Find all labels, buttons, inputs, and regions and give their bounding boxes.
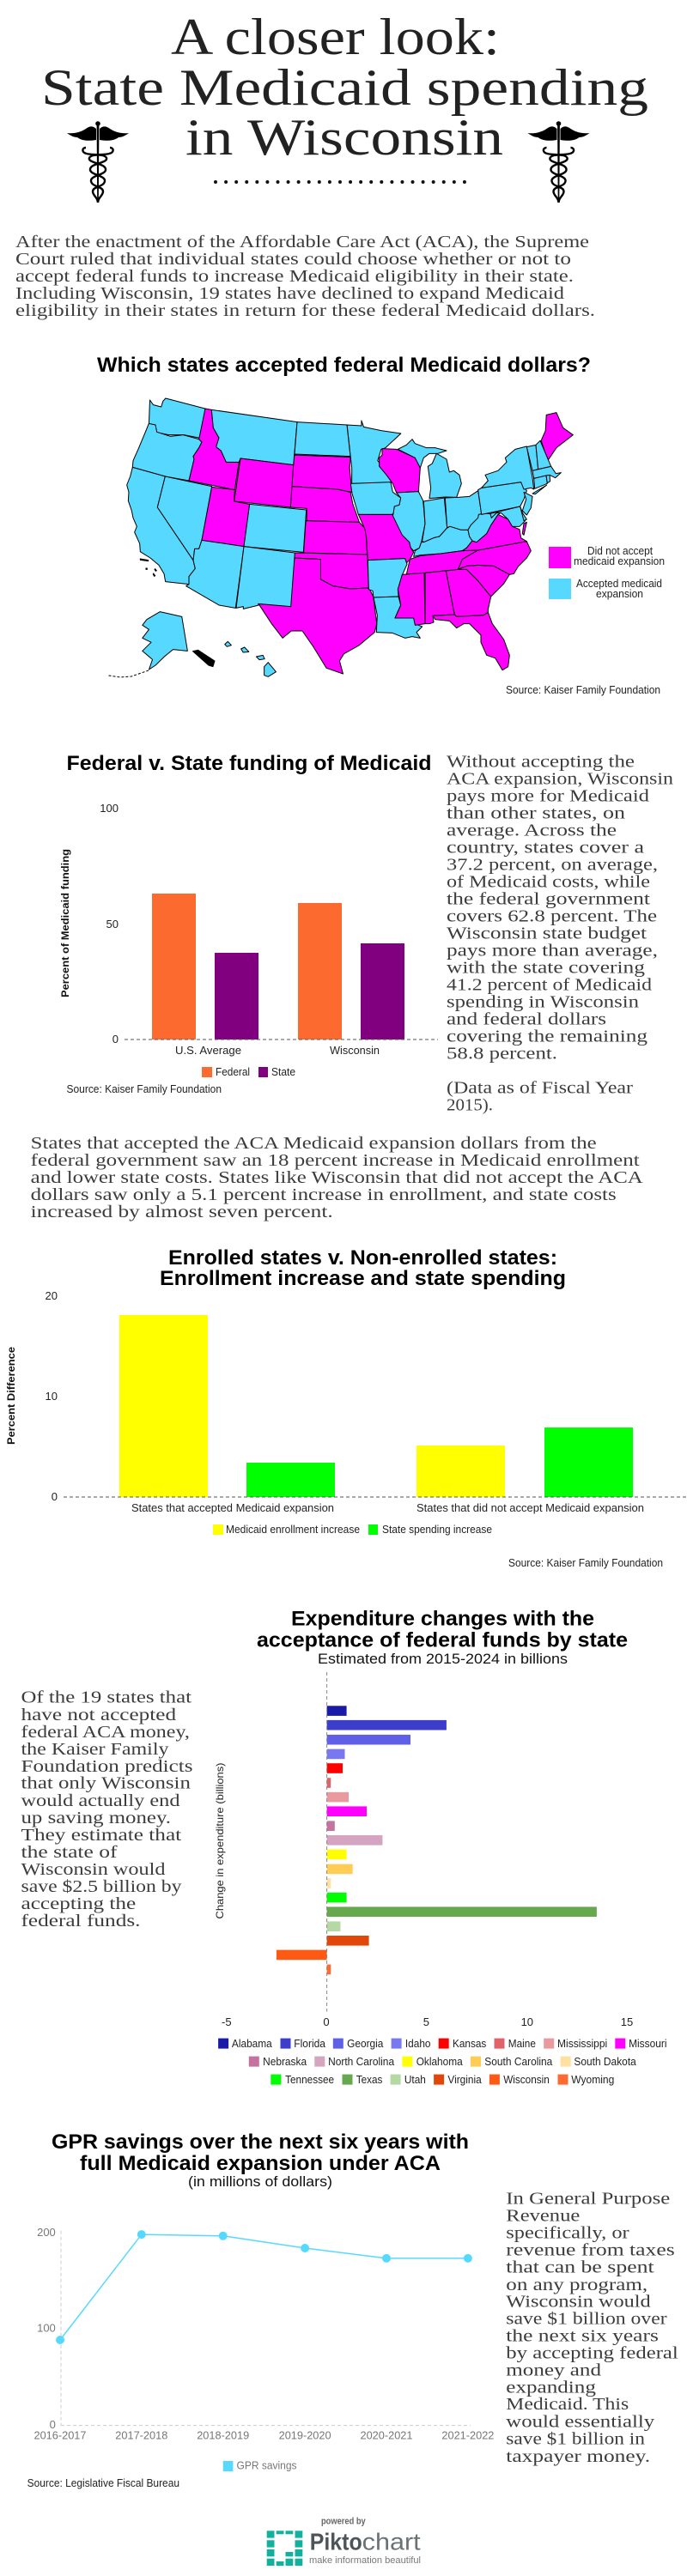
Piktochart logo: Pikto	[310, 2529, 362, 2555]
states: east	[350, 439, 561, 670]
text: Wisconsin pays more: the federal government	[447, 889, 651, 908]
text: General Purpose Revenue: money and	[506, 2361, 601, 2379]
heading: enrolled states: Enrollment increase and state spending	[160, 1267, 566, 1290]
chart legend: Missouri	[629, 2037, 667, 2050]
text: Wisconsin pays more: ACA expansion, Wisconsin	[447, 769, 673, 788]
heading: federal v. state: Federal v. State funding of Medicaid	[67, 752, 431, 775]
x axis ticks: 0	[323, 2015, 330, 2028]
heading: GPR savings: (in millions of dollars)	[188, 2173, 332, 2190]
heading: enrolled states	[160, 1246, 566, 1290]
title: State Medicaid spending	[41, 59, 648, 116]
map legend: Did not accept	[587, 544, 653, 557]
map legend: expansion	[596, 587, 643, 600]
x axis labels: 2017-2018	[115, 2429, 167, 2441]
chart legend: Tennessee	[285, 2073, 334, 2086]
text: General Purpose Revenue: save $1 billion in	[506, 2430, 645, 2449]
text: General Purpose Revenue: Revenue	[506, 2206, 580, 2225]
text: Wisconsin pays more	[447, 752, 673, 1114]
chart legend: State spending increase	[382, 1523, 492, 1536]
text: Wisconsin pays more: of Medicaid costs, while	[447, 872, 650, 891]
chart legend: Wisconsin	[503, 2073, 550, 2086]
text: Wisconsin pays more: and federal dollars	[447, 1009, 606, 1028]
source: enrollment: Source: Kaiser Family Foundation	[508, 1556, 663, 1569]
heading: expenditure changes: acceptance of federal funds by state	[257, 1628, 628, 1652]
x axis labels	[34, 2429, 494, 2441]
bar chart: federal v state: 0	[112, 1033, 119, 1046]
text: Wisconsin saves money: They estimate that	[21, 1826, 182, 1845]
data points	[56, 2230, 472, 2344]
x axis ticks: 15	[621, 2015, 633, 2028]
text: Wisconsin saves money: Foundation predicts	[21, 1757, 193, 1776]
chart legend: North Carolina	[328, 2055, 395, 2068]
x axis ticks: 10	[521, 2015, 533, 2028]
chart legend: Florida	[294, 2037, 326, 2050]
chart legend: Utah	[404, 2073, 426, 2086]
text: Wisconsin pays more: covers 62.8 percent. The	[447, 906, 657, 925]
text: Wisconsin saves money: Of the 19 states that	[21, 1688, 192, 1707]
bar chart: enrollment and spending	[5, 1289, 687, 1536]
text: Wisconsin pays more: with the state covering	[447, 958, 645, 977]
source: federal v state: Source: Kaiser Family Foundation	[67, 1082, 222, 1095]
text: enrollment comparison: federal government saw an 18 percent increase in Medicaid enrollment	[31, 1151, 640, 1170]
text: General Purpose Revenue: Medicaid. This	[506, 2395, 629, 2414]
bar chart: enrollment and spending: 20	[46, 1289, 58, 1302]
chart legend: Virginia	[447, 2073, 482, 2086]
text: Wisconsin saves money: the Kaiser Family	[21, 1740, 168, 1759]
text: Wisconsin pays more: than other states, on	[447, 803, 625, 822]
x axis labels: 2019-2020	[279, 2429, 331, 2441]
bars	[277, 1706, 597, 1974]
text: Wisconsin pays more: Without accepting the	[447, 752, 635, 771]
bar chart: enrollment and spending: States that did not accept Medicaid expansion	[416, 1501, 644, 1514]
intro text: accept federal funds to increase Medicaid eligibility in their state.	[15, 267, 574, 286]
intro text: Court ruled that individual states could choose whether or not to	[15, 250, 571, 269]
text: Wisconsin saves money: Wisconsin would	[21, 1860, 165, 1879]
chart legend: Idaho	[405, 2037, 431, 2050]
line chart: GPR savings	[34, 2226, 494, 2471]
map of US states	[109, 398, 573, 677]
chart legend: Oklahoma	[416, 2055, 463, 2068]
bar chart: federal v state: Wisconsin	[330, 1044, 380, 1057]
bar chart: federal v state	[59, 802, 438, 1078]
intro text: Including Wisconsin, 19 states have declined to expand Medicaid	[15, 284, 564, 303]
bar chart: enrollment and spending: 10	[46, 1390, 58, 1403]
chart legend: Nebraska	[263, 2055, 307, 2068]
x axis ticks	[222, 2015, 633, 2028]
y axis title: Percent Difference	[5, 1347, 17, 1445]
chart legend	[202, 1065, 295, 1078]
source: map: Source: Kaiser Family Foundation	[506, 683, 660, 696]
source: GPR: Source: Legislative Fiscal Bureau	[27, 2476, 179, 2489]
title: A closer look:	[171, 9, 500, 65]
text: Wisconsin pays more: average. Across the	[447, 821, 617, 839]
bar chart: federal v state: 100	[100, 802, 119, 815]
text: Wisconsin pays more: (Data as of Fiscal Year	[447, 1078, 633, 1097]
x axis ticks: -5	[222, 2015, 232, 2028]
chart legend: Texas	[356, 2073, 383, 2086]
text: General Purpose Revenue: expanding	[506, 2378, 596, 2397]
text: General Purpose Revenue: Wisconsin would	[506, 2292, 651, 2311]
y axis title: Percent of Medicaid funding	[59, 849, 71, 997]
Hawaii	[225, 641, 276, 676]
states: plains, Texas, Washington, Minnesota, Maine	[149, 398, 573, 674]
bar chart: enrollment and spending: States that accepted Medicaid expansion	[131, 1501, 334, 1514]
dotted rule	[216, 180, 465, 184]
chart legend: State	[271, 1065, 295, 1078]
text: General Purpose Revenue: revenue from taxes	[506, 2240, 675, 2259]
text: Wisconsin pays more: country, states cover a	[447, 838, 644, 857]
bar chart: federal v state: U.S. Average	[175, 1044, 241, 1057]
map legend	[549, 544, 665, 600]
Piktochart logo	[267, 2517, 421, 2566]
text: enrollment comparison: States that accepted the ACA Medicaid expansion dollars from the	[31, 1134, 597, 1153]
text: General Purpose Revenue: by accepting federal	[506, 2344, 678, 2363]
text: General Purpose Revenue: taxpayer money.	[506, 2447, 650, 2466]
chart legend: South Dakota	[574, 2055, 637, 2068]
savings line	[60, 2234, 468, 2340]
text: Wisconsin pays more: pays more than average,	[447, 941, 658, 960]
bar chart: expenditure by state	[214, 1672, 667, 2086]
Piktochart logo: powered by	[321, 2517, 366, 2527]
text: General Purpose Revenue: specifically, or	[506, 2223, 629, 2242]
Piktochart logo: chart	[362, 2529, 421, 2555]
Alaska	[109, 612, 276, 677]
heading: expenditure changes: Expenditure changes with the	[291, 1607, 594, 1631]
line chart: GPR savings: 200	[37, 2226, 56, 2239]
text: Wisconsin saves money: would actually end	[21, 1791, 180, 1810]
icon: left caduceus	[67, 121, 129, 203]
text: Wisconsin pays more: Wisconsin state budget	[447, 924, 647, 943]
heading: expenditure changes	[257, 1607, 628, 1667]
chart legend: Federal	[216, 1065, 250, 1078]
text: General Purpose Revenue	[506, 2189, 678, 2466]
x axis labels: 2018-2019	[197, 2429, 249, 2441]
chart legend: Medicaid enrollment increase	[226, 1523, 360, 1536]
x axis labels: 2020-2021	[361, 2429, 412, 2441]
states: west	[127, 409, 350, 609]
heading: GPR savings: GPR savings over the next six years with	[52, 2131, 469, 2154]
text: Wisconsin pays more: 41.2 percent of Medicaid	[447, 975, 652, 994]
chart legend: Maine	[508, 2037, 536, 2050]
text: Wisconsin saves money: save $2.5 billion by	[21, 1877, 182, 1896]
text: Wisconsin saves money: accepting the	[21, 1894, 136, 1913]
bars	[119, 1315, 633, 1497]
text: General Purpose Revenue: the next six years	[506, 2327, 659, 2346]
chart legend: Mississippi	[557, 2037, 607, 2050]
bars	[152, 894, 404, 1039]
text: Wisconsin saves money: have not accepted	[21, 1706, 176, 1724]
map legend: medicaid expansion	[574, 555, 665, 567]
text: enrollment comparison: and lower state costs. States like Wisconsin that did not accept the ACA	[31, 1168, 643, 1187]
chart legend: South Carolina	[484, 2055, 553, 2068]
text: Wisconsin saves money	[21, 1688, 193, 1930]
title: in Wisconsin	[185, 109, 503, 166]
chart legend: Wyoming	[571, 2073, 614, 2086]
icon: Piktochart mark	[267, 2531, 302, 2566]
heading: map: Which states accepted federal Medicaid dollars?	[97, 354, 591, 377]
intro text	[15, 233, 595, 320]
Piktochart logo: make information beautiful	[309, 2555, 421, 2566]
map legend: Accepted medicaid	[576, 577, 662, 590]
x axis labels: 2016-2017	[34, 2429, 86, 2441]
text: General Purpose Revenue: In General Purpose	[506, 2189, 670, 2208]
chart legend: Georgia	[347, 2037, 384, 2050]
y axis title: Change in expenditure (billions)	[214, 1763, 226, 1919]
chart legend	[213, 1523, 492, 1536]
text: Wisconsin pays more: covering the remaining	[447, 1027, 647, 1046]
heading: GPR savings	[52, 2131, 469, 2190]
text: General Purpose Revenue: on any program,	[506, 2276, 647, 2294]
intro text: eligibility in their states in return for these federal Medicaid dollars.	[15, 301, 595, 320]
heading: enrolled states: Enrolled states v. Non-enrolled states:	[168, 1246, 557, 1270]
text: Wisconsin pays more: 2015).	[447, 1095, 493, 1114]
x axis ticks: 5	[423, 2015, 429, 2028]
text: Wisconsin saves money: up saving money.	[21, 1809, 171, 1827]
heading: GPR savings: full Medicaid expansion under ACA	[80, 2152, 441, 2175]
chart legend: Kansas	[453, 2037, 487, 2050]
text: Wisconsin saves money: federal funds.	[21, 1912, 141, 1930]
bar chart: federal v state: 50	[106, 918, 119, 930]
text: Wisconsin pays more: spending in Wisconsin	[447, 992, 639, 1011]
text: enrollment comparison: dollars saw only a 5.1 percent increase in enrollment, and state costs	[31, 1185, 617, 1204]
chart legend	[218, 2037, 667, 2086]
x axis labels: 2021-2022	[441, 2429, 494, 2441]
title	[41, 9, 648, 166]
intro text: After the enactment of the Affordable Care Act (ACA), the Supreme	[15, 233, 589, 252]
text: General Purpose Revenue: save $1 billion over	[506, 2310, 667, 2329]
text: Wisconsin pays more: 58.8 percent.	[447, 1044, 557, 1063]
line chart: GPR savings: 0	[50, 2418, 56, 2431]
text: enrollment comparison: increased by almost seven percent.	[31, 1203, 333, 1221]
text: Wisconsin saves money: federal ACA money,	[21, 1723, 190, 1742]
line chart: GPR savings: 100	[37, 2321, 56, 2335]
bar chart: enrollment and spending: 0	[52, 1490, 58, 1503]
text: General Purpose Revenue: that can be spent	[506, 2258, 654, 2276]
heading: expenditure changes: Estimated from 2015-2024 in billions	[318, 1651, 568, 1667]
text: enrollment comparison	[31, 1134, 643, 1221]
chart legend: GPR savings	[237, 2458, 297, 2471]
text: Wisconsin pays more: 37.2 percent, on average,	[447, 855, 658, 874]
text: General Purpose Revenue: would essentially	[506, 2412, 654, 2431]
chart legend: Alabama	[232, 2037, 272, 2050]
text: Wisconsin saves money: the state of	[21, 1843, 118, 1862]
icon: right caduceus	[527, 121, 589, 203]
text: Wisconsin pays more: pays more for Medicaid	[447, 786, 649, 805]
text: Wisconsin saves money: that only Wisconsin	[21, 1774, 191, 1793]
